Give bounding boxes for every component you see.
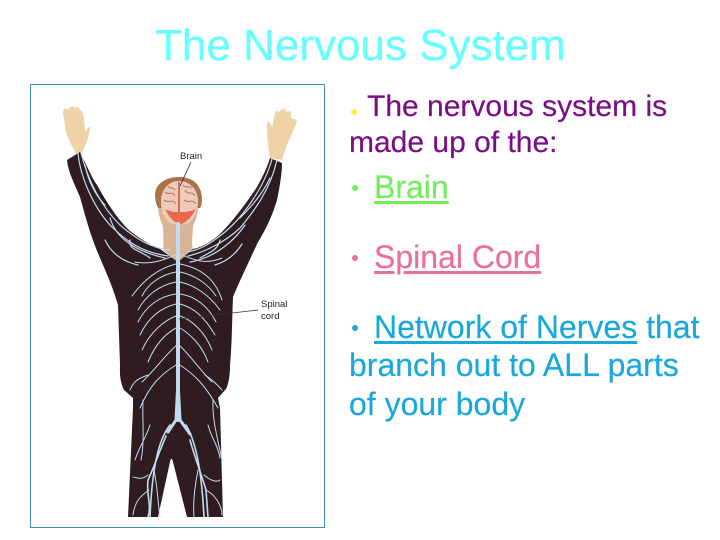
- text: network of nerves: Network of Nerves that: [374, 309, 699, 345]
- brain: [161, 181, 198, 224]
- leg nerves: [148, 425, 208, 517]
- text: network of nerves: of your body: [349, 386, 525, 422]
- bullet: Brain: Brain: [374, 169, 449, 205]
- bullet: Spinal Cord: Spinal Cord: [374, 239, 541, 275]
- body: dark sweatsuit: [67, 152, 282, 517]
- text: intro: made up of the:: [349, 126, 557, 159]
- nerves: [78, 153, 277, 517]
- icon: left hand: [63, 106, 90, 154]
- label: Brain: [180, 151, 202, 186]
- spinal cord: [176, 224, 180, 420]
- title: The Nervous System: [155, 21, 566, 70]
- text: network of nerves: [349, 309, 700, 422]
- label: Spinal cord: cord: [261, 311, 279, 322]
- text: intro: [349, 90, 667, 159]
- label: Spinal cord: [179, 299, 287, 322]
- text: network of nerves: branch out to ALL parts: [349, 347, 679, 383]
- label: Brain: Brain: [180, 151, 202, 162]
- label: Spinal cord: Spinal: [261, 299, 287, 310]
- text: intro: The nervous system is: [367, 90, 667, 123]
- icon: right hand: [267, 109, 297, 160]
- head and neck: [158, 205, 199, 262]
- arm nerves: [78, 153, 277, 265]
